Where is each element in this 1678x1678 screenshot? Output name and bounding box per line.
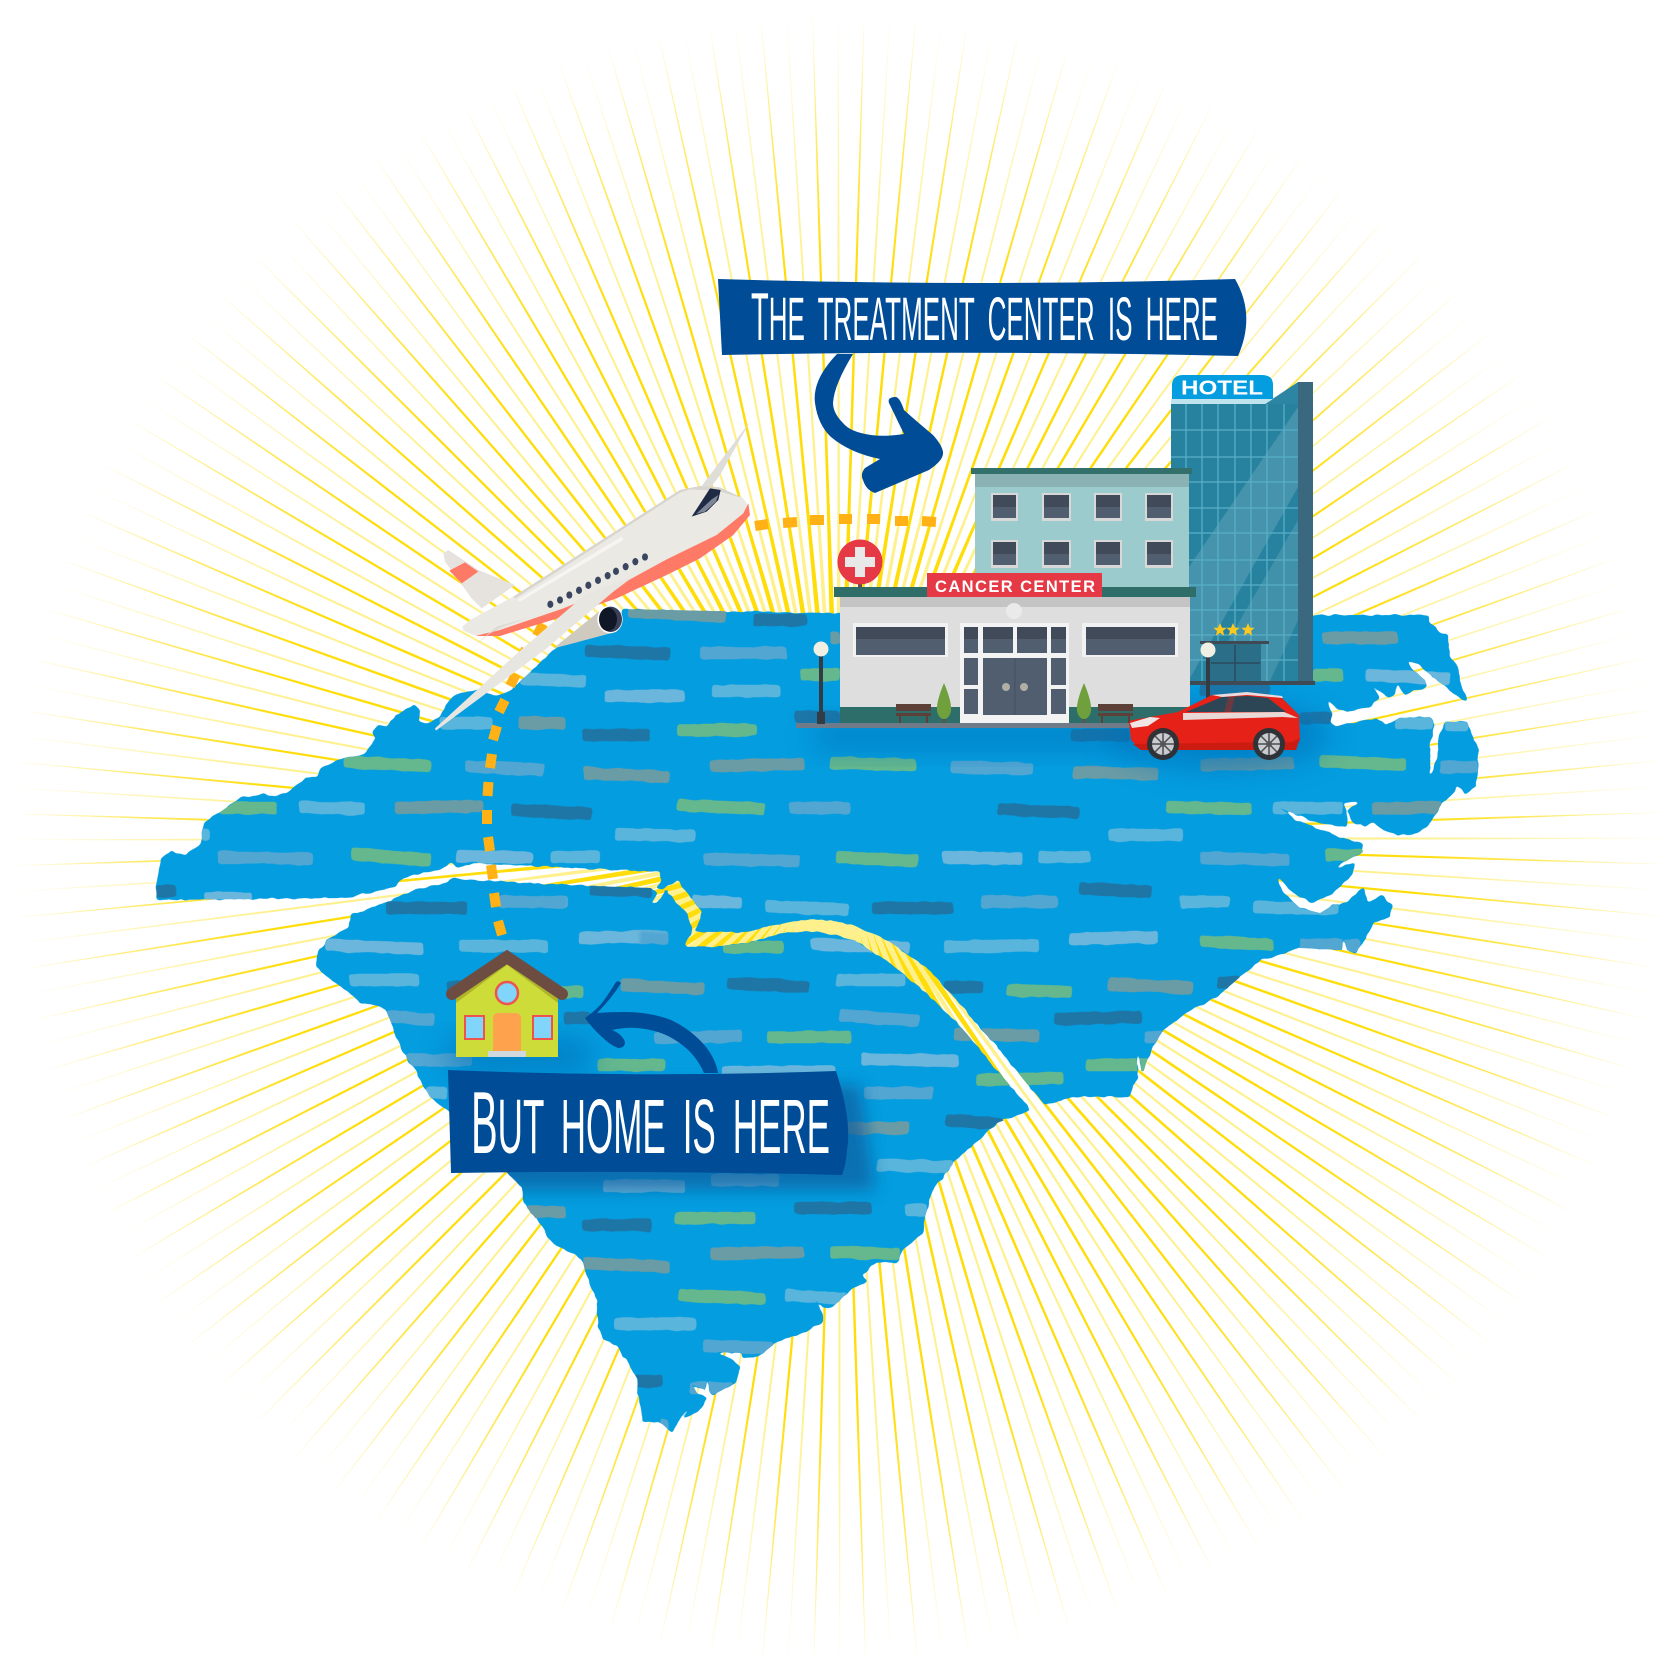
roof [452,957,562,994]
car windows [1186,696,1286,712]
tail stripe [449,562,478,583]
fuselage [462,486,749,635]
ground floor [834,587,1196,723]
belly stripe [475,503,750,636]
car headlight [1130,717,1160,728]
hotel entrance [1200,641,1269,681]
arrow: to home [585,981,718,1073]
right tree [1077,683,1091,723]
left bench [896,704,931,723]
car and hotel shadow [1110,700,1330,770]
flight path dotted line [487,519,936,935]
red car [1129,692,1300,760]
engine [553,608,622,648]
hotel side wall [1265,382,1313,681]
house [452,957,562,1057]
left window [465,1016,484,1039]
cancer center sign: CANCER CENTER [935,578,1095,596]
upper storey [971,468,1192,588]
map: North and South Carolina [156,609,1478,1433]
hotel [1171,375,1315,685]
car body [1129,694,1300,750]
cancer center sign [927,573,1102,597]
banner shadow [470,1085,875,1190]
house wall [456,957,558,1057]
front wheel [1147,728,1179,760]
near wing [435,577,633,731]
house shadow [450,1040,590,1070]
pavement [796,723,1140,728]
rear wheel [1253,728,1285,760]
hotel roof ledge [1171,399,1273,404]
medical cross sign [838,540,882,588]
right lamp [1200,642,1216,698]
left tree [937,683,951,723]
hotel sign: HOTEL [1181,378,1263,400]
banner shape [448,1070,848,1175]
tail fin [443,550,515,608]
South Carolina shape [315,878,1031,1433]
windshield [692,488,721,517]
soft shadows on map [450,700,1330,1190]
door [493,1013,521,1051]
left lamp [814,642,828,724]
round window [496,982,518,1004]
hotel glass front [1171,404,1298,681]
step [488,1051,526,1057]
cabin windows [547,553,648,608]
arrow: to treatment center [815,354,943,493]
entrance doors [960,623,1069,723]
airplane [435,422,750,731]
building shadow [815,722,1145,750]
cancer center building [796,468,1216,728]
hotel sign [1172,375,1273,400]
far wing [702,422,750,487]
under roof [456,957,558,1003]
right window [533,1016,552,1039]
callout: home [448,1070,848,1175]
right bench [1098,704,1133,723]
hotel base [1190,681,1315,685]
banner shape [718,279,1246,356]
map brush strokes [156,612,1478,1425]
car belt line [1183,712,1298,720]
rear stabilizer [468,618,528,651]
hotel stars [1213,623,1255,636]
text: BUT HOME IS HERE [471,1073,830,1172]
North Carolina shape [156,609,1478,1106]
callout: treatment center [718,279,1246,356]
